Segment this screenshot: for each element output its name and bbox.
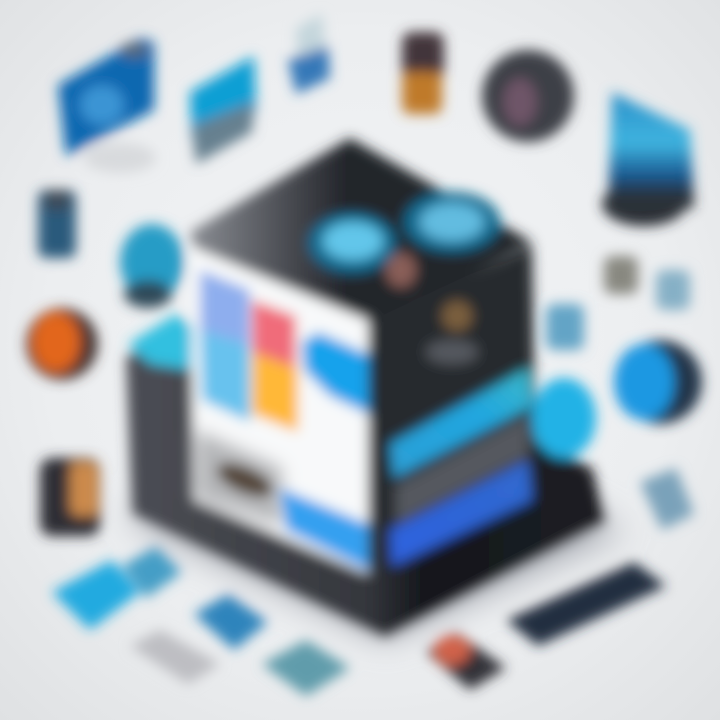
- icon: blue tablet right: [602, 92, 694, 226]
- screen blue banner: [280, 488, 368, 570]
- screen colour columns: [200, 270, 368, 432]
- screen grey lower-left area: [196, 430, 282, 526]
- icon: teal tile bottom: [262, 640, 350, 696]
- icon: blue disc behind cube left: [120, 224, 184, 308]
- cube left white screen: [190, 246, 368, 574]
- icon: orange device top: [402, 32, 444, 114]
- icon: device top centre-left: [190, 56, 256, 164]
- icon: tablet top left: [58, 38, 156, 173]
- icon: white slab bottom: [130, 630, 220, 684]
- right face blue bar: [390, 460, 532, 566]
- icon: blue tiles lower left: [52, 546, 182, 630]
- icon: phone top: [288, 14, 330, 94]
- icon: orange disc left: [26, 308, 98, 380]
- cube top blue tiles: [308, 192, 500, 287]
- icon: small blue tile right: [546, 304, 584, 350]
- screen dark thumbnail: [212, 456, 278, 504]
- cube shadow: [130, 490, 625, 640]
- cube base: [126, 300, 606, 638]
- icon: grey-blue tile lower right: [640, 468, 694, 530]
- blue left tab: [128, 314, 192, 370]
- icon: red and dark device bottom: [426, 632, 506, 690]
- cube right face: [368, 245, 536, 578]
- cyan disc on right side: [532, 378, 596, 458]
- panel: central cube: [126, 138, 606, 638]
- icon: grey gadget right: [604, 256, 690, 310]
- orange glyph on right face: [426, 301, 478, 364]
- cube top face: [190, 138, 532, 325]
- icon: blue disc right: [614, 340, 702, 424]
- icon: dark keyboard: [506, 562, 666, 646]
- icon: dark and orange device lower left: [40, 458, 100, 536]
- right face dark strip: [396, 416, 528, 524]
- icon: small device left: [38, 190, 76, 258]
- icon: blue tile bottom: [194, 594, 268, 650]
- right face cyan bar: [390, 368, 532, 478]
- icon: dark disc top right: [482, 50, 574, 142]
